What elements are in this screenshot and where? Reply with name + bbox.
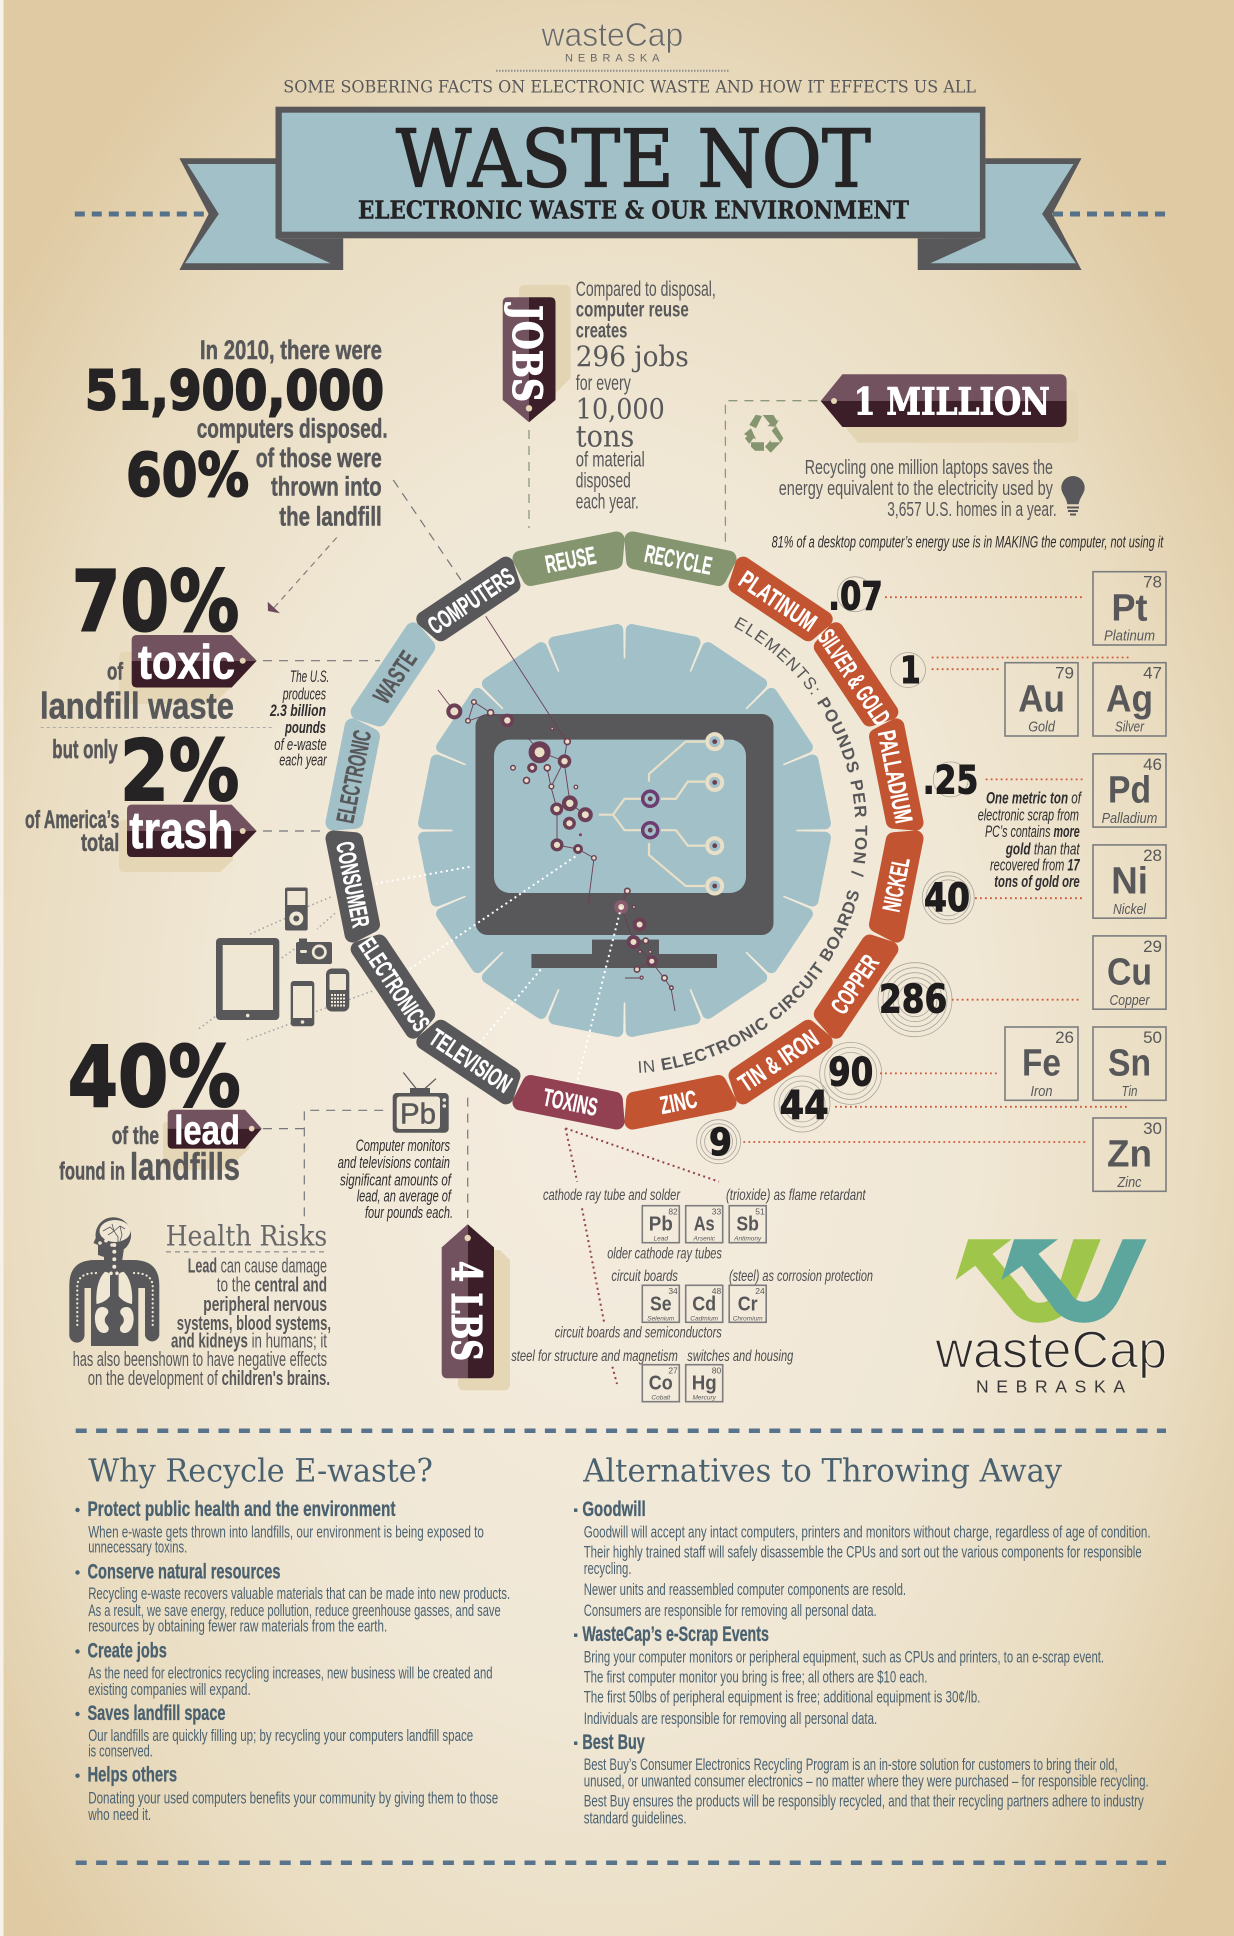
element: silver: Ag xyxy=(1106,678,1153,720)
stat: 2 percent of America's total trash xyxy=(25,722,257,872)
ring segment: platinum xyxy=(732,565,825,637)
element: antimony xyxy=(729,1206,766,1243)
icon: television with Pb: Pb xyxy=(400,1098,436,1130)
element: chromium: 24 xyxy=(755,1286,765,1296)
ring segment: reuse: REUSE xyxy=(543,542,598,579)
icon: camera xyxy=(296,938,332,964)
element: nickel: Nickel xyxy=(1113,901,1147,918)
ring segment: computers xyxy=(423,563,520,640)
element: gold: Gold xyxy=(1028,719,1055,736)
figure: 9 pounds zinc: 9 xyxy=(709,1121,732,1164)
item: create jobs: existing companies will expand. xyxy=(88,1680,251,1699)
icon: television with Pb xyxy=(393,1072,449,1133)
item: wastecap e-scrap events xyxy=(574,1623,1104,1728)
item: goodwill: Consumers are responsible for removing all personal data. xyxy=(584,1601,877,1620)
note: metric ton of scrap: tons of gold ore xyxy=(994,872,1080,891)
labels: toxin uses: (trioxide) as flame retardant xyxy=(726,1187,866,1204)
element: mercury xyxy=(686,1365,723,1402)
labels: toxin uses: switches and housing xyxy=(687,1348,793,1365)
element: palladium: Pd xyxy=(1108,769,1151,811)
ring segment: computers: COMPUTERS xyxy=(423,563,520,640)
element: lead xyxy=(642,1206,679,1243)
ring segment: toxins xyxy=(520,1082,621,1122)
tag: toxic: toxic xyxy=(138,637,235,690)
element: iron: Fe xyxy=(1022,1043,1061,1085)
text: health risks: peripheral nervous xyxy=(203,1294,327,1316)
callout: US e-waste production: pounds xyxy=(284,718,326,737)
stat: computers disposed in 2010: 60% xyxy=(126,441,249,511)
stat: 70 percent toxic landfill waste: 70% xyxy=(72,552,239,650)
ring segment: zinc xyxy=(628,1082,729,1122)
ring segment: silver and gold: SILVER & GOLD xyxy=(812,624,895,731)
stat: 2 percent of America's total trash: of America’s xyxy=(25,806,119,834)
ring segment: zinc: ZINC xyxy=(658,1085,700,1120)
tag: trash: trash xyxy=(129,802,233,860)
element: chromium: Chromium xyxy=(733,1315,763,1322)
text: computer reuse creates jobs: creates xyxy=(576,320,627,343)
element: iron: 26 xyxy=(1055,1028,1074,1047)
stat: computers disposed in 2010: In 2010, there were xyxy=(200,335,382,365)
element: lead: Lead xyxy=(654,1236,668,1243)
text: monitors contain lead: significant amounts of xyxy=(340,1170,453,1189)
ring segment: reuse xyxy=(520,539,621,579)
figure: 1 pound silver and gold xyxy=(890,649,1132,692)
ring segment: television: TELEVISION xyxy=(424,1024,517,1099)
element: copper xyxy=(1093,936,1166,1009)
text: computer reuse creates jobs: Compared to disposal, xyxy=(576,278,716,301)
stat: computers disposed in 2010 xyxy=(85,335,388,532)
toxin particle network xyxy=(438,616,675,1011)
text: computer reuse creates jobs: disposed xyxy=(576,470,631,493)
item: best buy xyxy=(574,1731,1149,1827)
ring segment: nickel: NICKEL xyxy=(878,855,916,914)
divider bottom xyxy=(76,1860,1166,1865)
callout: US e-waste production: produces xyxy=(282,684,326,703)
item: saves landfill space: Our landfills are quickly filling up; by recycling your computers landfill space xyxy=(88,1726,473,1745)
item: protect public health: Protect public health and the environment xyxy=(88,1498,396,1521)
item: wastecap e-scrap events: WasteCap’s e-Scrap Events xyxy=(582,1623,769,1646)
stat: 40 percent of lead: 40% xyxy=(68,1028,241,1126)
text: computer reuse creates jobs: 10,000 xyxy=(576,392,665,425)
element: selenium: 34 xyxy=(668,1286,678,1296)
ring segment: palladium: PALLADIUM xyxy=(872,728,918,826)
item: helps others: Helps others xyxy=(88,1764,177,1787)
element: iron: Iron xyxy=(1030,1083,1052,1100)
note: metric ton of scrap: gold than that xyxy=(1005,839,1081,858)
text: recycling one million laptops: energy equivalent to the electricity used by xyxy=(779,478,1053,500)
element: silver: 47 xyxy=(1143,664,1162,683)
element: tin: Tin xyxy=(1122,1083,1138,1100)
ring segment: recycle xyxy=(628,539,729,581)
element: tin xyxy=(1093,1027,1166,1100)
figure: .07 pounds platinum: .07 xyxy=(828,574,883,619)
element: zinc: Zinc xyxy=(1117,1174,1142,1191)
text: recycling one million laptops xyxy=(779,457,1057,521)
element: copper: Copper xyxy=(1110,992,1150,1009)
ring segment: consumer: CONSUMER xyxy=(330,839,375,930)
element: chromium: Cr xyxy=(738,1293,758,1315)
element: zinc: 30 xyxy=(1143,1119,1162,1138)
icon: computer monitor with circuit xyxy=(476,714,774,968)
figure: 40 pounds nickel xyxy=(922,872,1084,924)
tag: jobs xyxy=(503,285,571,422)
element: cobalt xyxy=(642,1365,679,1402)
heading: health risks: Health Risks xyxy=(166,1220,327,1253)
text: recycling one million laptops: 3,657 U.S. homes in a year. xyxy=(887,499,1057,521)
stat: computers disposed in 2010: thrown into xyxy=(271,472,382,502)
ring segment: toxins: TOXINS xyxy=(541,1084,600,1122)
item: conserve natural resources: Recycling e-waste recovers valuable materials that can be made into new products. xyxy=(88,1584,510,1603)
title: waste not: WASTE NOT xyxy=(396,113,871,206)
item: create jobs: Create jobs xyxy=(88,1639,167,1662)
text: computer reuse creates jobs: for every xyxy=(576,372,631,395)
element: palladium xyxy=(1093,754,1166,827)
element: cadmium: 48 xyxy=(712,1286,721,1296)
ring segment: electronic xyxy=(331,726,377,827)
ring segment: waste: WASTE xyxy=(368,646,423,709)
item: protect public health: When e-waste gets thrown into landfills, our environment is being exposed to xyxy=(88,1522,484,1541)
element: mercury: Hg xyxy=(692,1373,717,1395)
element: cadmium: Cadmium xyxy=(690,1315,719,1322)
figure: 286 pounds copper xyxy=(878,963,1082,1037)
stat: 70 percent toxic landfill waste: landfill waste xyxy=(40,686,234,727)
text: monitors contain lead: and televisions contain xyxy=(338,1153,450,1172)
element: selenium: Se xyxy=(650,1293,672,1315)
header logo: wasteCap Nebraska: NEBRASKA xyxy=(565,53,660,65)
element: selenium: Selenium xyxy=(647,1315,675,1322)
icon: light bulb xyxy=(1061,476,1085,516)
element: iron xyxy=(1005,1027,1078,1100)
element: platinum: Platinum xyxy=(1104,628,1155,645)
labels: toxin uses: steel for structure and magnetism xyxy=(511,1348,678,1365)
hub: blue petal gear xyxy=(424,630,825,1031)
header logo: wasteCap Nebraska xyxy=(496,16,730,71)
element: nickel xyxy=(1093,845,1166,918)
icon: tablet xyxy=(216,938,279,1020)
icon: keypad phone xyxy=(326,968,349,1012)
text: health risks: and kidneys in humans; it xyxy=(171,1330,327,1352)
item: best buy: Best Buy xyxy=(582,1731,645,1754)
note: metric ton of scrap: electronic scrap from xyxy=(978,806,1079,825)
item: saves landfill space: Saves landfill space xyxy=(88,1702,226,1725)
item: conserve natural resources: resources by obtaining fewer raw materials from the earth. xyxy=(88,1617,387,1636)
heading: alternatives: Alternatives to Throwing Away xyxy=(582,1452,1062,1490)
stat: 2 percent of America's total trash: but only xyxy=(52,734,118,764)
text: recycling one million laptops: Recycling one million laptops saves the xyxy=(805,457,1053,479)
element: antimony: Antimony xyxy=(733,1236,762,1243)
stat: 70 percent toxic landfill waste xyxy=(40,552,257,727)
ring segment: consumer xyxy=(330,834,375,935)
note: metric ton of scrap: PC’s contains more xyxy=(985,822,1080,841)
panel: toxic elements xyxy=(511,1187,873,1402)
item: goodwill: recycling. xyxy=(584,1559,632,1578)
figure: 1 pound silver and gold: 1 xyxy=(900,649,921,692)
labels: toxin uses: older cathode ray tubes xyxy=(607,1245,722,1262)
element: nickel: 28 xyxy=(1143,846,1162,865)
element: tin: 50 xyxy=(1143,1028,1162,1047)
figure: 44 pounds iron: 44 xyxy=(780,1083,829,1128)
tag: 4 lbs: 4 LBS xyxy=(442,1261,490,1361)
text: health risks xyxy=(73,1220,331,1390)
element: cobalt: Cobalt xyxy=(651,1395,671,1402)
text: monitors contain lead: four pounds each. xyxy=(365,1203,453,1222)
logo: wasteCap Nebraska large: wasteCap xyxy=(934,1322,1167,1380)
curved caption: elements, pounds per ton xyxy=(638,617,868,1073)
element: gold: Au xyxy=(1018,678,1065,720)
note: metric ton of scrap: recovered from 17 xyxy=(990,855,1081,874)
title banner xyxy=(75,107,1165,270)
text: monitors contain lead: Computer monitors xyxy=(356,1136,450,1155)
element: cadmium: Cd xyxy=(692,1293,716,1315)
text: health risks: to the central and xyxy=(217,1274,327,1296)
text: health risks: on the development of children's brains. xyxy=(88,1368,330,1390)
text: health risks: Lead can cause damage xyxy=(188,1256,327,1278)
logo: wasteCap Nebraska large xyxy=(934,1239,1167,1397)
ring segment: waste xyxy=(359,630,431,723)
labels: toxin uses: circuit boards and semiconductors xyxy=(555,1324,722,1341)
stat: computers disposed in 2010: of those were xyxy=(256,443,382,473)
item: protect public health xyxy=(75,1498,484,1557)
callout: US e-waste production: of e-waste xyxy=(274,735,327,754)
text: computer reuse creates jobs: 296 jobs xyxy=(576,340,689,373)
item: wastecap e-scrap events: The first 50lbs of peripheral equipment is free; additional equipment is 30¢/lb. xyxy=(584,1688,980,1707)
ring segment: electronics: ELECTRONICS xyxy=(353,933,435,1037)
labels: toxin uses: (steel) as corrosion protection xyxy=(729,1268,873,1285)
element: silver: Silver xyxy=(1115,719,1145,736)
figure: 90 pounds tin: 90 xyxy=(828,1050,873,1096)
labels: toxin uses: circuit boards xyxy=(611,1268,678,1285)
ring segment: electronics xyxy=(353,933,435,1037)
stat: computers disposed in 2010: 51,900,000 xyxy=(85,359,384,422)
ring segment: platinum: PLATINUM xyxy=(734,566,822,637)
element: antimony: 51 xyxy=(755,1206,765,1216)
text: computer reuse creates jobs: computer reuse xyxy=(576,299,689,322)
figure: 44 pounds iron xyxy=(774,1076,1128,1132)
curved caption: elements, pounds per ton: IN ELECTRONIC CIRCUIT BOARDS xyxy=(638,890,859,1073)
icons: consumer devices with dotted links xyxy=(199,888,373,1040)
element: gold: 79 xyxy=(1055,664,1074,683)
element: palladium: Palladium xyxy=(1102,810,1157,827)
item: goodwill xyxy=(574,1498,1151,1620)
element: platinum: 78 xyxy=(1143,573,1162,592)
icon: smartphone xyxy=(291,981,314,1026)
element: copper: Cu xyxy=(1107,952,1152,994)
stat: 2 percent of America's total trash: 2% xyxy=(120,722,239,820)
item: create jobs: As the need for electronics recycling increases, new business will be created and xyxy=(88,1663,492,1682)
stat: 40 percent of lead xyxy=(59,1028,262,1189)
element: copper: 29 xyxy=(1143,937,1162,956)
subtitle: SOME SOBERING FACTS ON ELECTRONIC WASTE AND HOW IT EFFECTS US ALL xyxy=(283,78,976,97)
callout: US e-waste production: each year xyxy=(279,750,328,769)
ring segment: nickel xyxy=(876,834,916,935)
text: health risks: systems, blood systems, xyxy=(177,1313,331,1335)
element: tin: Sn xyxy=(1108,1043,1151,1085)
labels: toxin uses xyxy=(511,1187,873,1365)
callout: US e-waste production: The U.S. xyxy=(290,667,329,686)
figure: 9 pounds zinc xyxy=(697,1120,1088,1164)
element: antimony: Sb xyxy=(736,1214,759,1236)
element: platinum xyxy=(1093,572,1166,645)
header logo: wasteCap Nebraska: wasteCap xyxy=(541,16,683,53)
text: computer reuse creates jobs: each year. xyxy=(576,490,639,513)
tag: lead: lead xyxy=(174,1107,240,1153)
text: computer reuse creates jobs: tons xyxy=(576,420,634,455)
ring segment: recycle: RECYCLE xyxy=(642,540,714,581)
ring segment: copper xyxy=(818,938,890,1031)
item: conserve natural resources xyxy=(75,1560,510,1636)
tag: 1 million xyxy=(821,374,1078,443)
element: cobalt: Co xyxy=(649,1373,673,1395)
tag: jobs: JOBS xyxy=(503,303,550,402)
panel: why recycle e-waste xyxy=(75,1452,510,1824)
element: lead: Pb xyxy=(649,1214,673,1236)
ring segment: electronic: ELECTRONIC xyxy=(331,728,377,826)
figure: 286 pounds copper: 286 xyxy=(879,978,947,1023)
figure: .07 pounds platinum xyxy=(828,574,1085,619)
item: create jobs xyxy=(75,1639,493,1699)
ring segment: copper: COPPER xyxy=(826,950,885,1019)
labels: toxin uses: cathode ray tube and solder xyxy=(543,1187,680,1204)
text: computer reuse creates jobs: of material xyxy=(576,449,645,472)
tag: 4 lbs xyxy=(442,1224,510,1390)
panel: alternatives to throwing away xyxy=(574,1452,1151,1827)
item: protect public health: unnecessary toxins. xyxy=(88,1538,187,1557)
ring segment: silver and gold xyxy=(812,624,895,731)
element: chromium xyxy=(729,1285,766,1322)
figure: .25 pounds palladium: .25 xyxy=(923,759,978,804)
item: saves landfill space: is conserved. xyxy=(88,1742,153,1761)
item: wastecap e-scrap events: The first computer monitor you bring is free; all others are $10 each. xyxy=(584,1667,927,1686)
element: mercury: 80 xyxy=(712,1365,721,1375)
stat: computers disposed in 2010: the landfill xyxy=(279,502,382,532)
white dotted connectors to the monitor xyxy=(376,855,621,1080)
element: gold xyxy=(1005,663,1078,736)
item: goodwill: Newer units and reassembled computer components are resold. xyxy=(584,1580,906,1599)
icon: human body with organs xyxy=(69,1217,159,1346)
element: lead: 82 xyxy=(668,1206,678,1216)
text: health risks: has also beenshown to have negative effects xyxy=(73,1349,327,1371)
item: goodwill: Goodwill xyxy=(582,1498,646,1521)
item: conserve natural resources: Conserve natural resources xyxy=(88,1560,280,1583)
element: platinum: Pt xyxy=(1112,587,1148,629)
text: monitors contain lead: lead, an average of xyxy=(357,1187,452,1206)
stat: 70 percent toxic landfill waste: of xyxy=(107,659,124,686)
heading: why recycle e-waste: Why Recycle E-waste? xyxy=(88,1452,433,1490)
stat: 40 percent of lead: landfills xyxy=(130,1147,240,1189)
ring segment: palladium xyxy=(872,726,918,827)
element: zinc: Zn xyxy=(1107,1134,1152,1176)
figure: .25 pounds palladium xyxy=(923,759,1084,804)
item: helps others: Donating your used computers benefits your community by giving them to those xyxy=(88,1788,498,1807)
element: arsenic: As xyxy=(694,1214,715,1236)
icon: recycling symbol xyxy=(744,415,783,453)
callout: US e-waste production xyxy=(269,667,329,769)
ring segment: tin and iron xyxy=(732,1024,825,1098)
toxin dotted leader lines xyxy=(566,1128,719,1384)
figure: 40 pounds nickel: 40 xyxy=(924,876,970,921)
icon: music player xyxy=(285,888,308,930)
item: helps others xyxy=(75,1764,498,1824)
element: silver xyxy=(1093,663,1166,736)
stat: 2 percent of America's total trash: total xyxy=(81,829,119,857)
text: monitors contain lead xyxy=(338,1136,453,1222)
note: metric ton of scrap: One metric ton of xyxy=(986,789,1083,808)
element: arsenic: Arsenic xyxy=(692,1236,716,1243)
ring segment: television xyxy=(424,1024,517,1099)
callout: US e-waste production: 2.3 billion xyxy=(269,701,326,720)
stat: 40 percent of lead: of the xyxy=(112,1122,159,1150)
element: cobalt: 27 xyxy=(668,1365,678,1375)
figure: 90 pounds tin xyxy=(820,1042,997,1104)
element: arsenic: 33 xyxy=(712,1206,721,1216)
item: best buy: standard guidelines. xyxy=(584,1808,687,1827)
stat: 40 percent of lead: found in xyxy=(59,1158,125,1186)
subtitle: electronic waste and our environment: ELECTRONIC WASTE & OUR ENVIRONMENT xyxy=(358,195,909,224)
item: helps others: who need it. xyxy=(88,1805,151,1824)
item: conserve natural resources: As a result, we save energy, reduce pollution, reduce greenhouse gasses, and save xyxy=(88,1601,501,1620)
divider top xyxy=(76,1428,1166,1433)
note: metric ton of scrap xyxy=(978,789,1083,891)
element: zinc xyxy=(1093,1118,1166,1191)
item: saves landfill space xyxy=(75,1702,473,1761)
element: selenium xyxy=(642,1285,679,1322)
logo: wasteCap Nebraska large: NEBRASKA xyxy=(976,1377,1125,1397)
element: mercury: Mercury xyxy=(692,1395,717,1402)
stat: computers disposed in 2010: computers disposed. xyxy=(197,414,388,444)
ring segment: tin and iron: TIN & IRON xyxy=(733,1025,824,1098)
element: cadmium xyxy=(686,1285,723,1322)
connector lines behind the ring xyxy=(41,401,820,1218)
element: arsenic xyxy=(686,1206,723,1243)
tag: 1 million: 1 MILLION xyxy=(854,379,1050,423)
item: wastecap e-scrap events: Individuals are responsible for removing all personal data. xyxy=(584,1709,877,1728)
element: nickel: Ni xyxy=(1111,860,1148,902)
element: palladium: 46 xyxy=(1143,755,1162,774)
text: computer reuse creates jobs xyxy=(576,278,716,513)
curved caption: elements, pounds per ton: ELEMENTS: POUNDS PER TON / xyxy=(734,617,868,878)
